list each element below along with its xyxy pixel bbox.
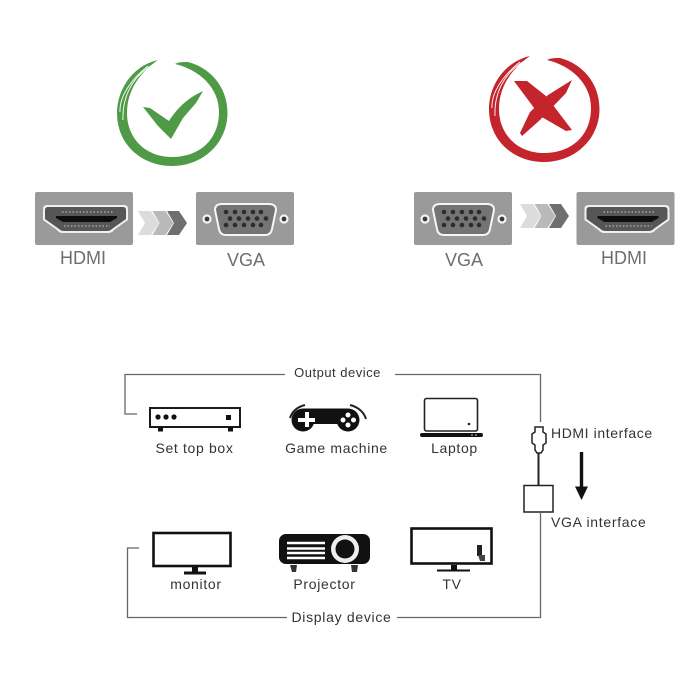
label: Projector: Projector xyxy=(293,576,356,592)
icon: HDMI connector and cable xyxy=(532,427,546,485)
arrows xyxy=(520,204,569,228)
label: monitor: monitor xyxy=(170,576,222,592)
label: VGA interface: VGA interface xyxy=(551,514,646,530)
panel: VGA to HDMI not supported xyxy=(414,192,674,270)
icon: projector xyxy=(279,534,370,572)
label: HDMI interface: HDMI interface xyxy=(551,425,653,441)
label VGA: VGA xyxy=(445,250,483,270)
icon: red cross circle xyxy=(489,56,600,162)
label: Laptop: Laptop xyxy=(431,440,478,456)
icon: green check circle xyxy=(117,60,228,166)
label VGA: VGA xyxy=(227,250,265,270)
icon: monitor xyxy=(154,533,230,574)
display device bracket xyxy=(128,512,540,618)
label: Game machine: Game machine xyxy=(285,440,388,456)
panel: HDMI to VGA supported xyxy=(35,192,294,270)
icon: VGA adapter box xyxy=(524,486,553,512)
arrows xyxy=(138,211,187,235)
VGA port xyxy=(414,192,512,245)
icon: laptop xyxy=(420,398,483,437)
HDMI port xyxy=(576,192,674,245)
label HDMI: HDMI xyxy=(60,248,106,268)
icon: game controller xyxy=(290,405,366,432)
label: Set top box: Set top box xyxy=(156,440,233,456)
label HDMI: HDMI xyxy=(601,248,647,268)
icon: set top box xyxy=(150,408,240,432)
VGA port xyxy=(196,192,294,245)
arrow: downward xyxy=(575,452,588,500)
HDMI port xyxy=(35,192,133,245)
label: TV: TV xyxy=(442,576,462,592)
icon: TV xyxy=(412,528,492,572)
output device bracket xyxy=(125,374,540,422)
heading: Display device: Display device xyxy=(291,609,392,625)
heading: Output device: Output device xyxy=(294,365,381,380)
